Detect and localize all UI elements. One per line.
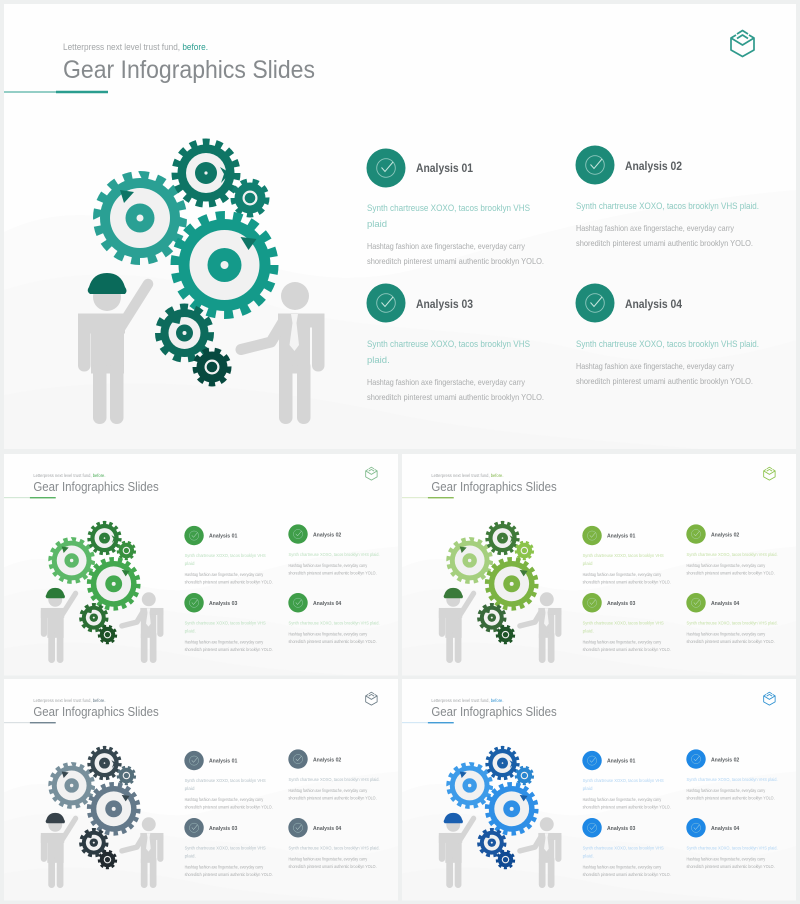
intro line: Letterpress next level trust fund, before. <box>431 473 503 478</box>
panel: green slide <box>4 454 398 675</box>
block: analysis 03: shoreditch pinterest umami authentic brooklyn YOLO. <box>185 872 273 877</box>
block: analysis 02: Analysis 02 <box>313 533 342 539</box>
block: analysis 01: Hashtag fashion axe fingerstache, everyday carry <box>185 572 264 577</box>
intro line: Letterpress next level trust fund, before. <box>33 473 105 478</box>
panel: slate slide <box>4 679 398 900</box>
panel: lime slide <box>402 454 796 675</box>
block: analysis 03: plaid. <box>583 629 594 635</box>
block: analysis 02: shoreditch pinterest umami authentic brooklyn YOLO. <box>687 570 775 575</box>
block: analysis 03: Hashtag fashion axe fingerstache, everyday carry <box>185 865 264 870</box>
block: analysis 02: shoreditch pinterest umami authentic brooklyn YOLO. <box>687 795 775 800</box>
block: analysis 01: Analysis 01 <box>416 161 473 175</box>
block: analysis 04: shoreditch pinterest umami authentic brooklyn YOLO. <box>289 639 377 644</box>
block: analysis 03 <box>582 818 671 877</box>
block: analysis 02: Analysis 02 <box>711 758 740 764</box>
block: analysis 04: Synth chartreuse XOXO, tacos brooklyn VHS plaid. <box>289 621 380 627</box>
title underline <box>4 497 56 499</box>
gear: small top <box>233 181 267 215</box>
block: analysis 04: Analysis 04 <box>313 826 342 832</box>
block: analysis 01: shoreditch pinterest umami authentic brooklyn YOLO. <box>185 579 273 584</box>
person: manager with tie <box>241 282 324 424</box>
block: analysis 04: shoreditch pinterest umami authentic brooklyn YOLO. <box>687 864 775 869</box>
block: analysis 01: Analysis 01 <box>607 759 636 765</box>
block: analysis 02: Synth chartreuse XOXO, tacos brooklyn VHS plaid. <box>289 552 380 558</box>
block: analysis 03: Hashtag fashion axe fingerstache, everyday carry <box>367 377 526 387</box>
block: analysis 01: Analysis 01 <box>209 534 238 540</box>
block: analysis 04: Synth chartreuse XOXO, tacos brooklyn VHS plaid. <box>576 339 759 350</box>
block: analysis 02 <box>686 749 778 800</box>
block: analysis 04 <box>288 593 380 644</box>
block: analysis 01: Hashtag fashion axe fingerstache, everyday carry <box>583 572 662 577</box>
block: analysis 02 <box>686 524 778 575</box>
title: Gear Infographics Slides <box>33 705 159 719</box>
title underline <box>4 91 56 93</box>
block: analysis 03: Analysis 03 <box>416 297 473 311</box>
block: analysis 03: Hashtag fashion axe fingerstache, everyday carry <box>185 640 264 645</box>
intro line: Letterpress next level trust fund, before. <box>63 42 208 52</box>
icon: cube logo <box>366 692 377 705</box>
illustration: people and gears <box>41 748 163 888</box>
block: analysis 04: Hashtag fashion axe fingerstache, everyday carry <box>576 361 735 371</box>
block: analysis 03: Synth chartreuse XOXO, tacos brooklyn VHS <box>583 846 664 852</box>
block: analysis 01 <box>582 526 671 584</box>
icon: cube logo <box>366 467 377 480</box>
block: analysis 01: Hashtag fashion axe fingerstache, everyday carry <box>185 797 264 802</box>
block: analysis 04: Analysis 04 <box>711 826 740 832</box>
title underline <box>402 722 454 724</box>
block: analysis 03: shoreditch pinterest umami authentic brooklyn YOLO. <box>583 872 671 877</box>
block: analysis 04 <box>686 818 778 869</box>
block: analysis 01: Synth chartreuse XOXO, tacos brooklyn VHS <box>367 203 530 214</box>
block: analysis 01: plaid <box>583 561 593 567</box>
block: analysis 01: Synth chartreuse XOXO, tacos brooklyn VHS <box>185 553 266 559</box>
illustration: people and gears <box>41 523 163 663</box>
block: analysis 01: Synth chartreuse XOXO, tacos brooklyn VHS <box>583 553 664 559</box>
block: analysis 02: Hashtag fashion axe fingerstache, everyday carry <box>687 788 766 793</box>
block: analysis 02: Synth chartreuse XOXO, tacos brooklyn VHS plaid. <box>687 552 778 558</box>
block: analysis 03 <box>582 593 671 652</box>
block: analysis 01: Synth chartreuse XOXO, tacos brooklyn VHS <box>185 778 266 784</box>
block: analysis 03: Hashtag fashion axe fingerstache, everyday carry <box>583 865 662 870</box>
block: analysis 03: Hashtag fashion axe fingerstache, everyday carry <box>583 640 662 645</box>
block: analysis 02: Analysis 02 <box>711 533 740 539</box>
title: Gear Infographics Slides <box>63 56 315 84</box>
block: analysis 01 <box>366 148 544 266</box>
block: analysis 02: Analysis 02 <box>625 159 682 173</box>
block: analysis 03 <box>184 818 273 877</box>
gear: lower <box>158 306 211 360</box>
block: analysis 03: shoreditch pinterest umami authentic brooklyn YOLO. <box>185 647 273 652</box>
intro line: Letterpress next level trust fund, before. <box>33 698 105 703</box>
block: analysis 04: Synth chartreuse XOXO, tacos brooklyn VHS plaid. <box>289 846 380 852</box>
block: analysis 03: Synth chartreuse XOXO, tacos brooklyn VHS <box>185 621 266 627</box>
block: analysis 03: plaid. <box>367 355 390 366</box>
block: analysis 01: Analysis 01 <box>607 534 636 540</box>
block: analysis 01: shoreditch pinterest umami authentic brooklyn YOLO. <box>583 804 671 809</box>
block: analysis 02: Synth chartreuse XOXO, tacos brooklyn VHS plaid. <box>687 777 778 783</box>
block: analysis 04: Hashtag fashion axe fingerstache, everyday carry <box>687 857 766 862</box>
block: analysis 01: Hashtag fashion axe fingerstache, everyday carry <box>583 797 662 802</box>
block: analysis 01 <box>184 526 273 584</box>
block: analysis 03: shoreditch pinterest umami authentic brooklyn YOLO. <box>367 392 544 402</box>
block: analysis 01: plaid <box>185 561 195 567</box>
block: analysis 03: Analysis 03 <box>209 826 238 832</box>
title underline accent <box>56 91 108 93</box>
block: analysis 01 <box>582 751 671 809</box>
block: analysis 03: Synth chartreuse XOXO, tacos brooklyn VHS <box>185 846 266 852</box>
block: analysis 03: plaid. <box>185 854 196 860</box>
block: analysis 01 <box>184 751 273 809</box>
block: analysis 02: Hashtag fashion axe fingerstache, everyday carry <box>687 563 766 568</box>
block: analysis 04 <box>576 284 759 386</box>
block: analysis 02: Hashtag fashion axe fingerstache, everyday carry <box>289 788 368 793</box>
block: analysis 04 <box>686 593 778 644</box>
icon: cube logo <box>731 30 754 56</box>
block: analysis 02 <box>288 749 380 800</box>
block: analysis 03: Synth chartreuse XOXO, tacos brooklyn VHS <box>367 339 530 350</box>
intro line: Letterpress next level trust fund, before. <box>431 698 503 703</box>
block: analysis 03 <box>366 284 544 402</box>
block: analysis 02: Hashtag fashion axe fingerstache, everyday carry <box>576 223 735 233</box>
panel: blue slide <box>402 679 796 900</box>
block: analysis 01: Hashtag fashion axe fingerstache, everyday carry <box>367 241 526 251</box>
block: analysis 04: Analysis 04 <box>313 601 342 607</box>
person: worker with hard hat <box>78 273 148 424</box>
block: analysis 04: Hashtag fashion axe fingerstache, everyday carry <box>289 857 368 862</box>
icon: cube logo <box>764 467 775 480</box>
panel: teal main slide <box>4 4 796 449</box>
block: analysis 04: Synth chartreuse XOXO, tacos brooklyn VHS plaid. <box>687 846 778 852</box>
block: analysis 01: shoreditch pinterest umami authentic brooklyn YOLO. <box>185 804 273 809</box>
icon: cube logo <box>764 692 775 705</box>
block: analysis 01: plaid <box>367 219 387 230</box>
block: analysis 04: Synth chartreuse XOXO, tacos brooklyn VHS plaid. <box>687 621 778 627</box>
block: analysis 02: shoreditch pinterest umami authentic brooklyn YOLO. <box>289 795 377 800</box>
gear: large light <box>97 175 183 261</box>
block: analysis 02: Hashtag fashion axe fingerstache, everyday carry <box>289 563 368 568</box>
block: analysis 03: plaid. <box>583 854 594 860</box>
block: analysis 03: plaid. <box>185 629 196 635</box>
block: analysis 04: Hashtag fashion axe fingerstache, everyday carry <box>289 632 368 637</box>
block: analysis 02: Synth chartreuse XOXO, tacos brooklyn VHS plaid. <box>289 777 380 783</box>
gear: small lower <box>195 350 229 384</box>
block: analysis 01: shoreditch pinterest umami authentic brooklyn YOLO. <box>367 256 544 266</box>
block: analysis 04 <box>288 818 380 869</box>
block: analysis 02: Synth chartreuse XOXO, tacos brooklyn VHS plaid. <box>576 201 759 212</box>
block: analysis 02 <box>576 146 759 248</box>
block: analysis 04: Analysis 04 <box>711 601 740 607</box>
block: analysis 03: Synth chartreuse XOXO, tacos brooklyn VHS <box>583 621 664 627</box>
title underline <box>402 497 454 499</box>
illustration: people and gears <box>439 748 561 888</box>
block: analysis 04: Analysis 04 <box>625 297 682 311</box>
block: analysis 03: Analysis 03 <box>607 601 636 607</box>
title: Gear Infographics Slides <box>431 480 557 494</box>
title: Gear Infographics Slides <box>33 480 159 494</box>
block: analysis 04: shoreditch pinterest umami authentic brooklyn YOLO. <box>576 376 753 386</box>
block: analysis 04: Hashtag fashion axe fingerstache, everyday carry <box>687 632 766 637</box>
block: analysis 02: Analysis 02 <box>313 758 342 764</box>
gear: largest <box>175 216 274 314</box>
block: analysis 03: Analysis 03 <box>607 826 636 832</box>
block: analysis 04: shoreditch pinterest umami authentic brooklyn YOLO. <box>687 639 775 644</box>
block: analysis 03 <box>184 593 273 652</box>
block: analysis 03: Analysis 03 <box>209 601 238 607</box>
block: analysis 01: shoreditch pinterest umami authentic brooklyn YOLO. <box>583 579 671 584</box>
block: analysis 04: shoreditch pinterest umami authentic brooklyn YOLO. <box>289 864 377 869</box>
title: Gear Infographics Slides <box>431 705 557 719</box>
block: analysis 01: plaid <box>583 786 593 792</box>
block: analysis 02 <box>288 524 380 575</box>
block: analysis 01: Synth chartreuse XOXO, tacos brooklyn VHS <box>583 778 664 784</box>
block: analysis 03: shoreditch pinterest umami authentic brooklyn YOLO. <box>583 647 671 652</box>
block: analysis 01: plaid <box>185 786 195 792</box>
block: analysis 01: Analysis 01 <box>209 759 238 765</box>
title underline <box>4 722 56 724</box>
block: analysis 02: shoreditch pinterest umami authentic brooklyn YOLO. <box>289 570 377 575</box>
gear: top <box>175 142 237 204</box>
illustration: people and gears <box>439 523 561 663</box>
block: analysis 02: shoreditch pinterest umami authentic brooklyn YOLO. <box>576 238 753 248</box>
